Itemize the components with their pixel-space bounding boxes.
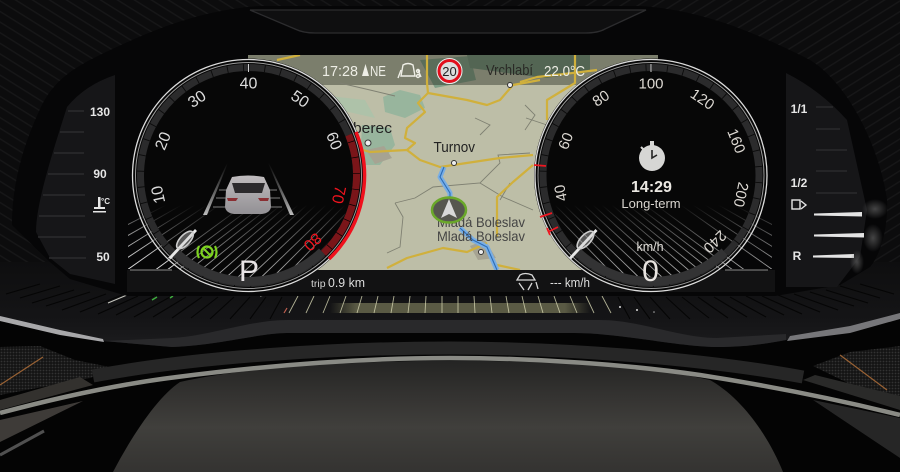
map place names: Mladá Boleslav (437, 215, 525, 230)
red speed marks (534, 165, 558, 235)
right fuel pod: 1/1 (791, 102, 808, 116)
scale numbers: 20 (152, 130, 175, 153)
needle (568, 229, 598, 259)
map forests (320, 55, 590, 165)
right fuel pod: R (793, 249, 802, 263)
status: time and heading (323, 64, 386, 76)
scale numbers: 200 (730, 181, 751, 209)
scale numbers (551, 76, 751, 256)
map place names: Turnov (434, 140, 476, 156)
scale numbers: 80 (300, 229, 324, 254)
icon: coolant temperature: °C (101, 197, 110, 206)
bottom status bar: --- km/h (550, 275, 590, 290)
red zone (324, 135, 356, 253)
left temperature pod (36, 75, 115, 284)
textile seat fabric, right (813, 346, 900, 398)
scale band (140, 68, 356, 284)
outer rings (535, 60, 767, 292)
scale numbers: 60 (322, 130, 345, 153)
scale numbers (149, 76, 348, 254)
outside temperature: 22.0°C (544, 64, 585, 80)
steering wheel rim (0, 348, 900, 458)
top major tick (248, 64, 250, 72)
scale numbers: 50 (288, 88, 312, 112)
right fuel pod (786, 73, 888, 287)
map status strip shade (236, 55, 664, 85)
scale numbers: 10 (149, 184, 169, 205)
car (225, 176, 271, 214)
needle (168, 229, 197, 259)
scale numbers: 40 (551, 183, 571, 203)
status: time and heading: 17:28 (322, 64, 358, 80)
cluster shroud (12, 6, 887, 296)
speed value: 0 (642, 255, 659, 288)
map place names (353, 62, 534, 244)
bottom status bar (127, 270, 775, 292)
right fuel pod: 1/2 (791, 176, 808, 190)
icon: coolant temperature (93, 197, 110, 212)
trip label: Long-term (621, 196, 681, 211)
scale numbers: 30 (185, 88, 210, 112)
scale numbers: 100 (638, 76, 664, 92)
icon: traffic assist (517, 274, 538, 290)
icon: stopwatch (639, 141, 665, 171)
map place names: berec (353, 121, 392, 137)
hood recess (250, 10, 646, 33)
map yellow roads (277, 55, 597, 270)
speed limit sign (437, 58, 462, 84)
textile seat fabric, left (0, 346, 115, 395)
map urban areas (366, 146, 496, 260)
steering wheel hub (113, 361, 783, 472)
scale numbers: 120 (687, 86, 717, 114)
status: time and heading: NE (370, 64, 386, 80)
map place names: Mladá Boleslav (437, 229, 525, 244)
scale numbers: 40 (240, 76, 258, 92)
icon: assist car (398, 64, 421, 78)
left temperature pod: 90 (93, 167, 107, 181)
scale numbers: 160 (723, 126, 748, 156)
left temperature pod: 50 (96, 250, 110, 264)
speed unit: km/h (636, 240, 664, 254)
icon: fuel pump (792, 200, 806, 209)
bottom status bar: 0.9 km (328, 275, 365, 290)
gear indicator: P (239, 255, 259, 288)
scale numbers: 240 (700, 227, 729, 256)
navigation map (236, 55, 664, 270)
icon: parking brake (198, 246, 216, 258)
speed limit sign: 20 (442, 64, 457, 79)
top major tick (650, 64, 652, 72)
scale band (543, 68, 759, 284)
scale numbers: 60 (555, 130, 577, 152)
outer rings (132, 60, 364, 292)
display black background (127, 55, 775, 292)
right gauge: speedometer (520, 58, 773, 292)
silver trim strips (0, 313, 900, 342)
lower dash panel with tick slots (0, 262, 900, 347)
left gauge: power meter (127, 58, 380, 292)
position marker (432, 198, 466, 222)
bottom hatching lines around gauges (128, 218, 174, 269)
road lanes (203, 163, 294, 215)
scale numbers: 80 (590, 87, 613, 110)
scale numbers: 70 (328, 184, 348, 205)
map boundaries (340, 83, 547, 253)
map city dots (365, 82, 512, 254)
bottom status bar: trip (311, 278, 326, 290)
map place names: Vrchlabí (486, 62, 534, 79)
trip time: 14:29 (631, 179, 672, 196)
map blue route (440, 167, 497, 270)
left temperature pod: 130 (90, 105, 110, 119)
